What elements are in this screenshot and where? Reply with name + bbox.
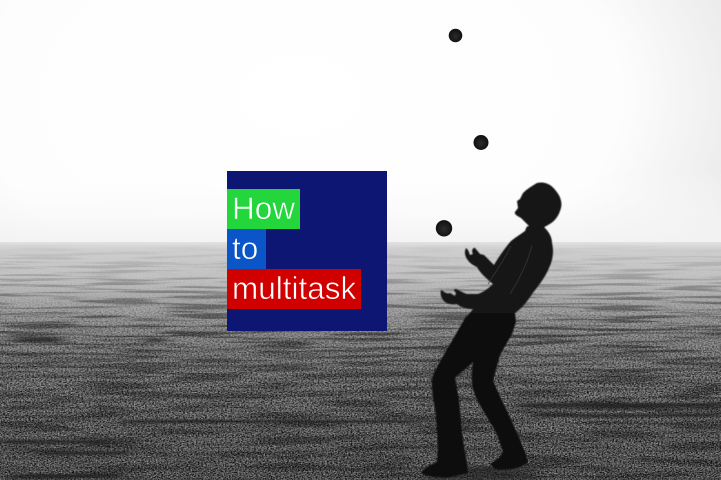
ball: middle (474, 135, 488, 150)
shirt highlight (488, 245, 532, 294)
foot shadow (418, 467, 542, 480)
juggler silhouette (421, 182, 561, 478)
ball: top (449, 29, 462, 42)
title line: to: to (232, 230, 258, 266)
title line: to (227, 229, 266, 269)
ball: low (436, 220, 452, 236)
title line: How: How (232, 190, 295, 226)
title line: multitask: multitask (232, 270, 356, 306)
panel: title block (227, 171, 387, 331)
field (0, 242, 721, 480)
sky (0, 0, 721, 245)
